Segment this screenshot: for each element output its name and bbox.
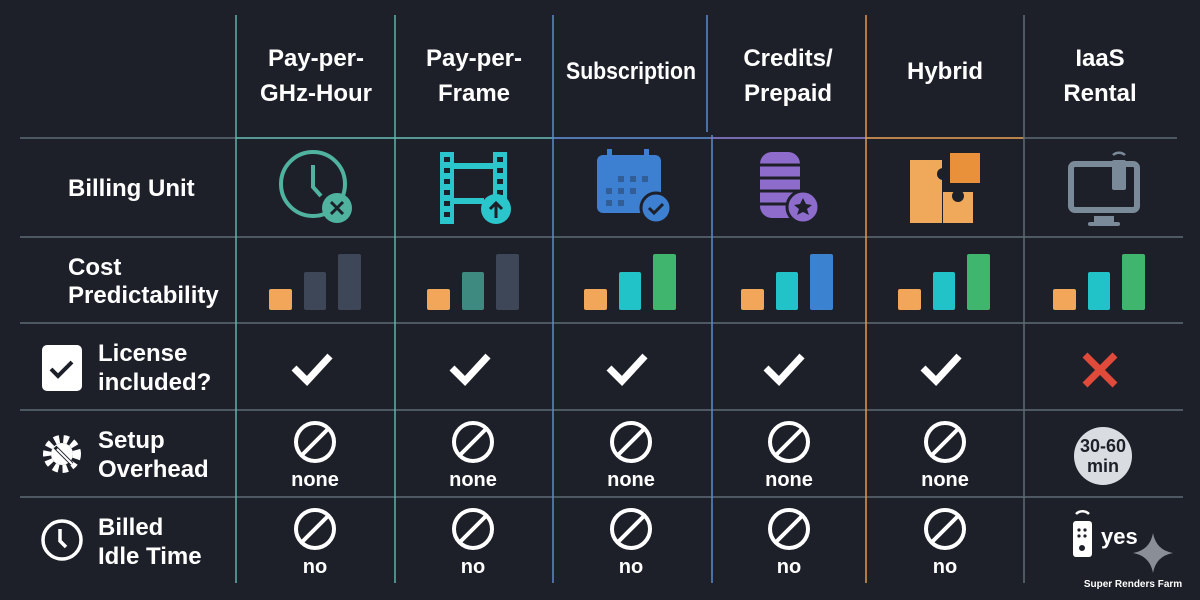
sparkle xyxy=(1133,533,1173,573)
row labels: Cost xyxy=(68,254,121,281)
row labels: Idle Time xyxy=(98,543,202,570)
idle yes remote: yes xyxy=(1101,524,1138,549)
text: none xyxy=(449,469,497,491)
setup & idle none/no xyxy=(296,423,964,548)
text: no xyxy=(303,556,327,578)
header row: Credits/ xyxy=(743,45,833,72)
icon: gear xyxy=(47,439,77,469)
header row: IaaS xyxy=(1075,45,1125,72)
row labels: Overhead xyxy=(98,456,209,483)
icon: puzzle xyxy=(910,153,980,223)
icon: checkbox xyxy=(42,345,82,391)
badge 30-60 min xyxy=(1074,427,1132,485)
row labels: included? xyxy=(98,369,211,396)
bar charts xyxy=(269,254,1145,310)
row labels: Predictability xyxy=(68,282,219,309)
row labels: License xyxy=(98,340,187,367)
icon: calendar xyxy=(597,149,671,223)
text: no xyxy=(933,556,957,578)
header row: Subscription xyxy=(566,58,696,85)
row labels: Billed xyxy=(98,514,163,541)
icon: monitor remote xyxy=(1071,153,1137,226)
row labels: Billing Unit xyxy=(68,175,195,202)
license checks xyxy=(294,355,1115,385)
header row: Pay-per- xyxy=(426,45,522,72)
badge 30-60 min: min xyxy=(1087,456,1119,476)
text: none xyxy=(765,469,813,491)
icon: clock x xyxy=(281,152,352,223)
idle yes remote xyxy=(1073,511,1138,557)
row labels xyxy=(68,175,219,570)
header row: Rental xyxy=(1063,80,1137,107)
header row: Pay-per- xyxy=(268,45,364,72)
text: none xyxy=(921,469,969,491)
badge 30-60 min: 30-60 xyxy=(1080,436,1126,456)
text: no xyxy=(461,556,485,578)
icon: coins xyxy=(760,152,819,223)
header row: Prepaid xyxy=(744,80,832,107)
row labels: Setup xyxy=(98,427,165,454)
text: none xyxy=(291,469,339,491)
icon: clock xyxy=(43,521,81,559)
text: no xyxy=(619,556,643,578)
text: no xyxy=(777,556,801,578)
text: none xyxy=(607,469,655,491)
header row: GHz-Hour xyxy=(260,80,372,107)
icon: film xyxy=(440,152,511,224)
header row xyxy=(260,45,1137,107)
watermark: Super Renders Farm xyxy=(1084,579,1182,590)
header row: Hybrid xyxy=(907,58,983,85)
header row: Frame xyxy=(438,80,510,107)
